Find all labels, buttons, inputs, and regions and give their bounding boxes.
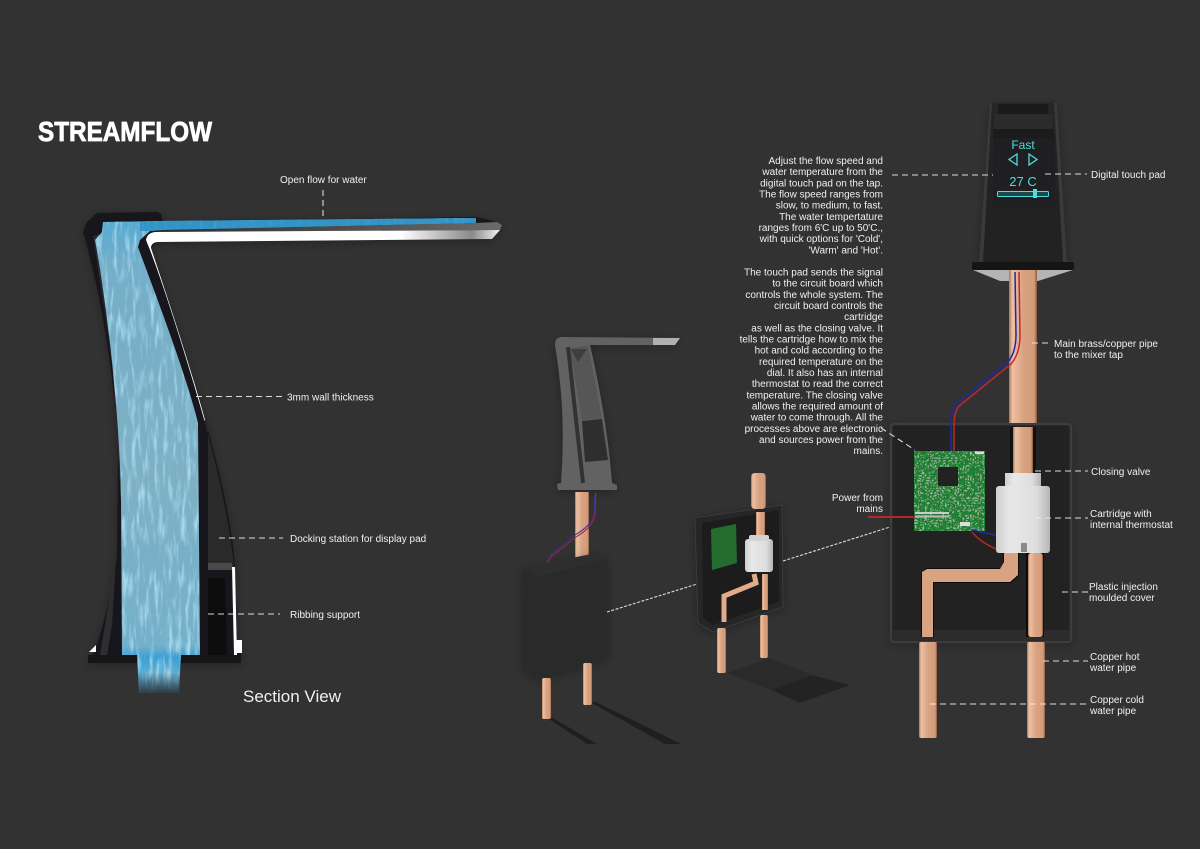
- label: cartridge: [1035, 509, 1173, 531]
- explanatory text: water to come through. All the: [750, 413, 883, 424]
- pad base: [972, 262, 1074, 281]
- label: main pipe: to the mixer tap: [1054, 350, 1123, 361]
- leader: text to touch pad: [892, 174, 993, 176]
- explanatory text: hot and cold according to the: [755, 346, 883, 357]
- label: digital touch pad: Digital touch pad: [1091, 170, 1166, 181]
- label: cold pipe: Copper cold: [1090, 695, 1144, 706]
- panel: closed assembly: [522, 337, 681, 744]
- label: hot pipe: Copper hot: [1090, 652, 1140, 663]
- section view caption: Section View: [243, 687, 342, 706]
- label: plastic cover: moulded cover: [1089, 593, 1155, 604]
- label: plastic cover: Plastic injection: [1089, 582, 1158, 593]
- spout highlight: [89, 222, 502, 655]
- label: docking station: Docking station for display pad: [290, 534, 426, 545]
- explanatory text: dial. It also has an internal: [767, 368, 883, 379]
- explanatory text: [740, 156, 883, 457]
- explanatory text: mains.: [854, 446, 883, 457]
- dotted connector: [607, 580, 710, 612]
- label: power from mains: [832, 493, 883, 515]
- explanatory text: Adjust the flow speed and: [768, 156, 883, 167]
- explanatory text: to the circuit board which: [772, 279, 883, 290]
- main pipe: [1009, 270, 1037, 423]
- explanatory text: ranges from 6'C up to 50'C.,: [759, 223, 883, 234]
- label: closing valve: [1035, 467, 1151, 478]
- mini tap: [555, 337, 680, 490]
- screen: temperature: 27 C: [1009, 174, 1037, 189]
- panel: open assembly: [695, 473, 850, 703]
- explanatory text: thermostat to read the correct: [752, 379, 883, 390]
- label: hot pipe: [1043, 652, 1140, 674]
- leader: text to circuit board: [881, 428, 915, 450]
- floor shadows: [547, 702, 681, 744]
- water flow: [95, 217, 477, 695]
- label: plastic cover: [1062, 582, 1158, 604]
- explanatory text: with quick options for 'Cold',: [759, 234, 883, 245]
- label: main pipe: Main brass/copper pipe: [1054, 339, 1158, 350]
- lower pipes: [542, 663, 592, 719]
- screen: arrows: [1009, 154, 1037, 165]
- label: cold pipe: water pipe: [1089, 706, 1137, 717]
- closed box cover: [522, 553, 608, 679]
- label: power from mains: mains: [856, 504, 883, 515]
- label: ribbing: Ribbing support: [290, 610, 360, 621]
- cartridge with thermostat: [996, 473, 1050, 553]
- open box: [695, 505, 783, 632]
- mini pipe and wires: [545, 492, 596, 565]
- explanatory text: The water tempertature: [779, 212, 883, 223]
- explanatory text: cartridge: [844, 312, 883, 323]
- panel: section view of tap: [83, 175, 502, 706]
- pipes in box: [717, 473, 768, 673]
- red power wire: [868, 516, 915, 518]
- floor shadows: [727, 658, 850, 703]
- title: STREAMFLOW: [38, 116, 212, 147]
- tap body section walls: [83, 212, 502, 663]
- label: cartridge: Cartridge with: [1090, 509, 1152, 520]
- label: cold pipe: [930, 695, 1144, 717]
- digital touch pad: [979, 103, 1067, 262]
- explanatory text: temperature. The closing valve: [746, 390, 883, 401]
- explanatory text: slow, to medium, to fast.: [776, 201, 883, 212]
- pipe above cartridge: [1009, 412, 1037, 474]
- explanatory text: tells the cartridge how to mix the: [740, 334, 883, 346]
- explanatory text: allows the required amount of: [752, 402, 883, 412]
- label: digital touch pad: [1045, 170, 1166, 181]
- copper pipes below box: [919, 642, 1045, 738]
- green board: [711, 524, 737, 570]
- label: cartridge: internal thermostat: [1090, 520, 1173, 531]
- screen: slider: [998, 189, 1048, 198]
- explanatory text: and sources power from the: [759, 435, 883, 446]
- explanatory text: digital touch pad on the tap.: [760, 178, 883, 189]
- dotted connector: [783, 527, 890, 561]
- label: open flow: Open flow for water: [280, 175, 367, 186]
- label: power from mains: Power from: [832, 493, 883, 504]
- explanatory text: The flow speed ranges from: [759, 190, 883, 200]
- wires: [951, 272, 1020, 452]
- explanatory text: The touch pad sends the signal: [744, 268, 883, 278]
- explanatory text: as well as the closing valve. It: [751, 323, 883, 334]
- panel: exploded assembly: [868, 103, 1074, 738]
- label: main pipe: [1032, 339, 1158, 361]
- board to cartridge wires: [972, 530, 1020, 549]
- explanatory text: circuit board controls the: [774, 301, 883, 312]
- label: wall thickness: 3mm wall thickness: [287, 392, 374, 404]
- plastic cover box: [891, 424, 1071, 642]
- label: open flow: [280, 175, 367, 218]
- screen: fast label: Fast: [1011, 138, 1035, 152]
- cartridge: [745, 535, 773, 572]
- explanatory text: water temperature from the: [761, 167, 883, 178]
- copper pipes in box: [921, 553, 1044, 637]
- label: hot pipe: water pipe: [1089, 663, 1137, 674]
- label: closing valve: Closing valve: [1091, 467, 1151, 478]
- explanatory text: 'Warm' and 'Hot'.: [808, 245, 883, 256]
- explanatory text: processes above are electronic: [745, 424, 883, 435]
- circuit board: [914, 451, 985, 531]
- explanatory text: required temperature on the: [759, 357, 883, 368]
- explanatory text: controls the whole system. The: [745, 290, 883, 301]
